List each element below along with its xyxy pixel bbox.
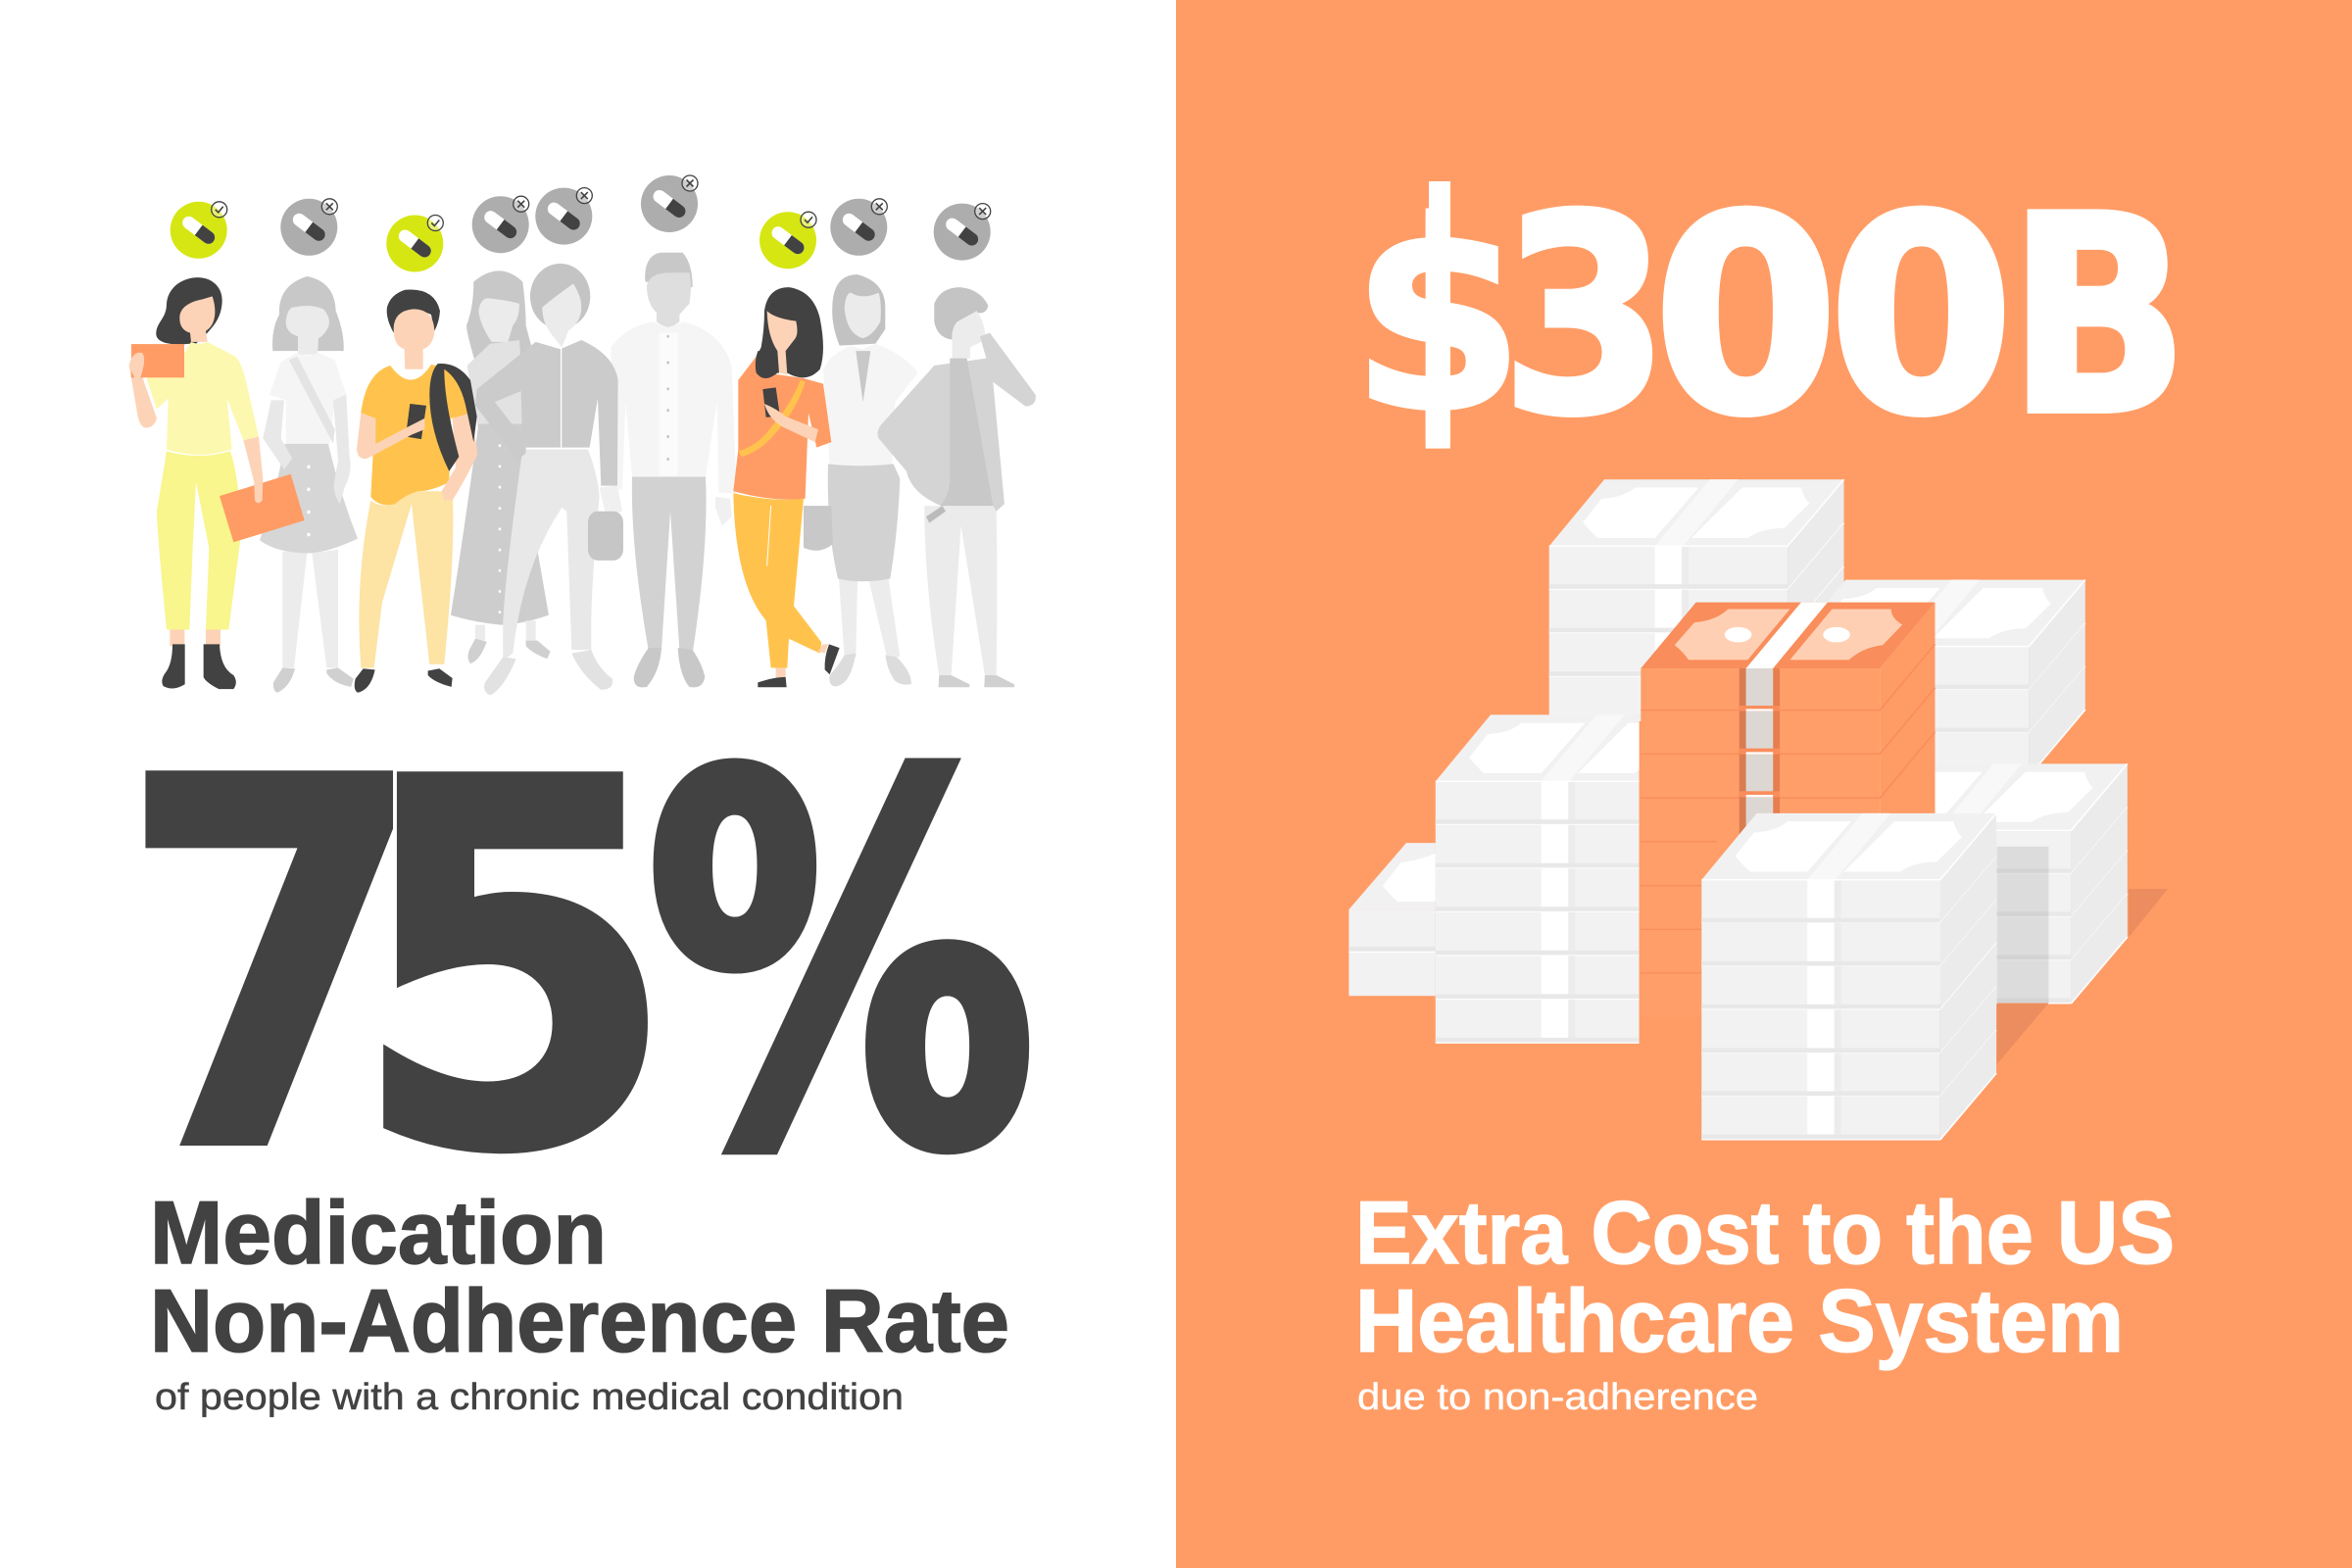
person: woman with skirt and sash (grey) — [260, 276, 358, 693]
heading: medication non-adherence rate: Medication — [150, 1184, 607, 1283]
icon: pill taken (green) 2 — [386, 216, 443, 272]
big statistic: $300B: 0 — [1829, 158, 2014, 475]
icon: pill taken (green) — [171, 202, 227, 259]
person: man on the phone (grey) — [878, 287, 1036, 687]
icon: pill missed (grey) 2 — [472, 196, 529, 253]
stack: rear right — [1790, 580, 2085, 777]
stack: centre orange — [1641, 603, 1936, 1017]
big statistic: $300B — [1352, 158, 2188, 475]
big statistic: 75%: 7 — [120, 675, 424, 1261]
shadow: cast by front stack — [1997, 847, 2048, 1064]
person: woman in yellow with orange folders — [129, 277, 305, 689]
panel: left white background — [0, 0, 1176, 1568]
stack: far right — [1833, 763, 2128, 1004]
person: woman with grey skirt — [823, 274, 918, 686]
subtext: chronic condition: of people with a chronic medical condition — [155, 1377, 904, 1418]
person: woman in grey jacket with handbag — [475, 264, 623, 695]
big statistic: 75%: 5 — [351, 676, 677, 1262]
heading: extra cost: Healthcare System — [1355, 1272, 2124, 1371]
icon: pill missed (grey) 6 — [934, 204, 991, 261]
heading: medication non-adherence rate — [150, 1184, 1009, 1371]
stack: rear top — [1549, 479, 1844, 721]
shadow: cast on ground right — [2129, 889, 2168, 938]
person: young man in yellow shirt with backpack — [355, 289, 477, 693]
icon: pill missed (grey) — [280, 199, 337, 256]
heading: extra cost: Extra Cost to the US — [1355, 1184, 2175, 1283]
person: woman in long dress (grey) — [451, 270, 551, 663]
big statistic: $300B: 3 — [1501, 158, 1669, 475]
stack: left — [1435, 714, 1640, 1044]
heading: extra cost — [1355, 1184, 2175, 1371]
panel: right orange background — [1176, 0, 2352, 1568]
icons: pill badges above each person — [171, 175, 991, 272]
heading: medication non-adherence rate: Non-Adherence Rate — [150, 1272, 1009, 1371]
icon: pill missed (grey) 5 — [830, 199, 887, 256]
big statistic: 75%: % — [647, 673, 1036, 1259]
icon: pill missed (grey) 4 — [641, 175, 698, 232]
stack: front — [1701, 813, 1996, 1141]
big statistic: $300B: 0 — [1653, 158, 1838, 475]
person: woman in orange with phone — [733, 287, 840, 687]
big statistic: $300B: $ — [1352, 168, 1523, 469]
icon: pill missed (grey) 3 — [535, 188, 592, 245]
icon: pill taken (green) 3 — [760, 212, 816, 269]
illustration: crowd of people — [129, 253, 1036, 695]
stack: far left — [1348, 843, 1436, 996]
subtext: due to non-adherence: due to non-adherence — [1357, 1377, 1758, 1418]
big statistic: $300B: B — [2008, 158, 2188, 475]
person: man in white shirt (grey) — [611, 253, 737, 687]
illustration: stacks of money — [1348, 479, 2168, 1141]
big statistic: 75% — [120, 673, 1036, 1262]
